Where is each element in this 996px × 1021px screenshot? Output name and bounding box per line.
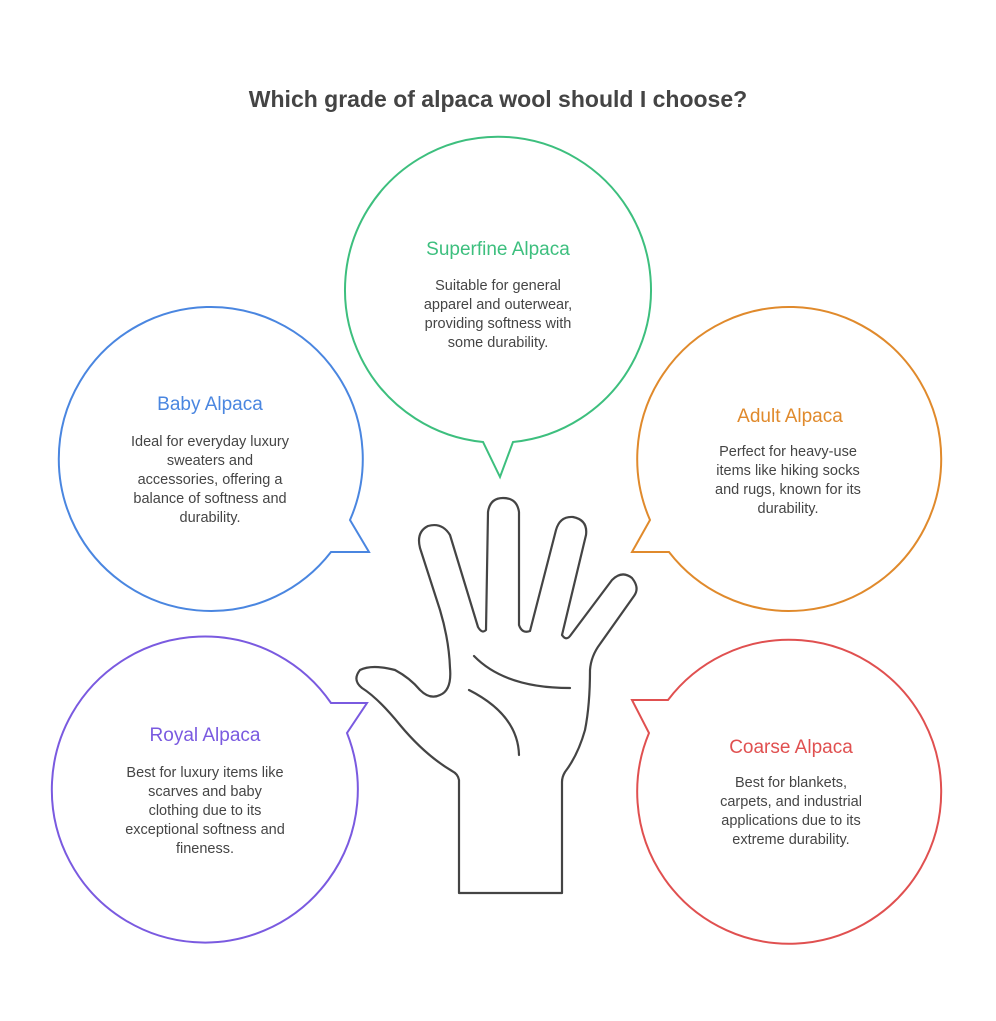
panel: adult alpaca <box>632 307 941 611</box>
panel: adult alpaca: and rugs, known for its <box>715 482 861 498</box>
panel: coarse alpaca: Best for blankets, <box>735 775 847 791</box>
panel: royal alpaca: exceptional softness and <box>125 822 285 838</box>
panel: superfine alpaca: Superfine Alpaca <box>426 239 570 260</box>
panel: adult alpaca: Adult Alpaca <box>737 406 843 427</box>
panel: coarse alpaca: extreme durability. <box>732 832 850 848</box>
panel: superfine alpaca: providing softness with <box>425 316 571 332</box>
panel: adult alpaca: durability. <box>758 501 818 517</box>
panel: royal alpaca: scarves and baby <box>148 784 263 800</box>
panel: superfine alpaca: Suitable for general <box>435 278 561 294</box>
panel: baby alpaca <box>59 307 369 611</box>
panel: coarse alpaca: applications due to its <box>721 813 861 829</box>
panel: baby alpaca: Baby Alpaca <box>157 394 263 415</box>
panel: adult alpaca: items like hiking socks <box>716 463 860 479</box>
icon: hand <box>356 498 637 893</box>
panel: superfine alpaca <box>345 137 651 477</box>
panel: adult alpaca: Perfect for heavy-use <box>719 444 857 460</box>
panel: baby alpaca: durability. <box>180 510 240 526</box>
panel: baby alpaca: Ideal for everyday luxury <box>131 434 290 450</box>
panel: superfine alpaca: apparel and outerwear, <box>424 297 572 313</box>
panel: royal alpaca <box>52 637 367 943</box>
panel: royal alpaca: clothing due to its <box>149 803 261 819</box>
panel: superfine alpaca: some durability. <box>448 335 548 351</box>
panel: royal alpaca: fineness. <box>176 841 234 857</box>
panel: coarse alpaca: carpets, and industrial <box>720 794 862 810</box>
panel: baby alpaca: balance of softness and <box>133 491 287 507</box>
title: Which grade of alpaca wool should I choose? <box>249 86 747 112</box>
panel: coarse alpaca: Coarse Alpaca <box>729 737 853 758</box>
panel: coarse alpaca <box>632 640 941 944</box>
panel: baby alpaca: accessories, offering a <box>138 472 283 488</box>
panel: royal alpaca: Royal Alpaca <box>150 725 261 746</box>
panel: baby alpaca: sweaters and <box>167 453 253 469</box>
panel: royal alpaca: Best for luxury items like <box>126 765 284 781</box>
